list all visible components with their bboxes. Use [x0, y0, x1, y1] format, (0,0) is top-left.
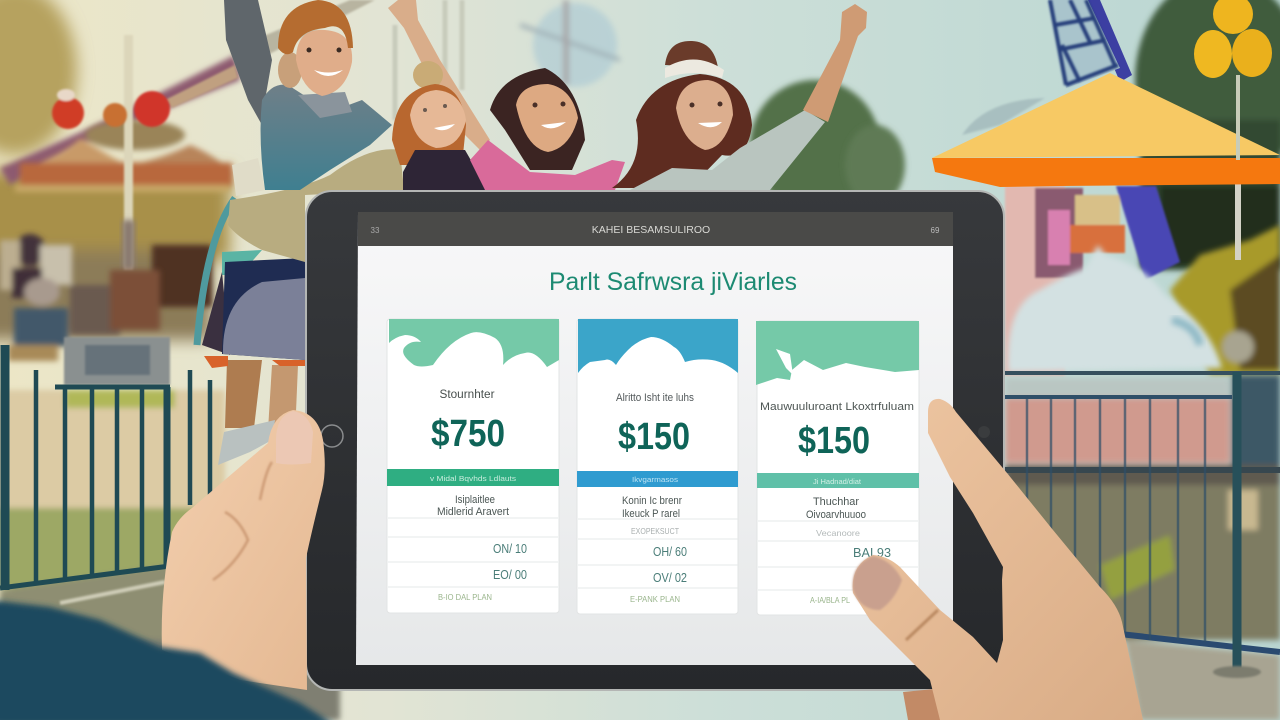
pricing card 2: Ikvgarmasos	[632, 475, 678, 484]
pricing card 3: $150	[798, 420, 870, 462]
ground behind left fence	[0, 390, 340, 720]
pricing card 2: OH/ 60	[653, 544, 687, 559]
people riding	[197, 0, 867, 465]
pricing card 2: EXOPEKSUCT	[631, 526, 679, 536]
pricing card 3: BAI 93	[853, 545, 891, 560]
pricing card 1: ON/ 10	[493, 541, 527, 556]
app header bar: KAHEI BESAMSULIROO	[592, 224, 710, 236]
right fence	[1005, 372, 1280, 670]
lamp post	[124, 35, 133, 270]
carousel roof	[15, 120, 235, 192]
app header bar	[358, 212, 953, 246]
pricing card 1: Midlerid Aravert	[437, 506, 509, 518]
pricing card 1: EO/ 00	[493, 567, 527, 582]
pricing card 2: Konin Ic brenr	[622, 495, 682, 507]
pricing card 1: v Midal Bqvhds Ldlauts	[430, 474, 516, 483]
seat rims	[204, 356, 305, 368]
pricing card 2	[577, 319, 738, 614]
yellow balloons	[1194, 0, 1272, 160]
girl with bun	[392, 61, 488, 190]
background poles	[395, 0, 462, 120]
tan drape	[228, 149, 404, 262]
left thumb nail	[276, 411, 313, 464]
girl in pink	[470, 68, 625, 190]
fence curb	[60, 582, 165, 603]
fence post base	[1213, 666, 1261, 678]
tree right	[1135, 0, 1280, 270]
foliage under carousel	[0, 170, 230, 340]
pricing card 2: Ikeuck P rarel	[622, 508, 680, 520]
tree centre	[750, 80, 880, 210]
raised arm	[388, 0, 490, 150]
carousel dark interior	[152, 245, 212, 307]
right thumb crease	[906, 610, 938, 640]
pricing card 3: Vecanoore	[816, 528, 860, 538]
rider shorts	[222, 258, 305, 360]
dark foreground shoulder	[0, 600, 335, 720]
right park ground	[1005, 375, 1280, 720]
pricing card 3: A-IA/BLA PL	[810, 596, 850, 605]
teen boy	[224, 0, 392, 190]
pricing card 3: Oivoarvhuuoo	[806, 509, 866, 521]
umbrella tent	[932, 73, 1280, 260]
ride frame	[197, 198, 235, 345]
pricing card 2: $150	[618, 416, 690, 458]
crowd	[0, 234, 160, 361]
grey fence panel	[64, 337, 170, 385]
tree top left	[0, 0, 77, 155]
left fence	[0, 345, 210, 590]
rider shoe	[218, 420, 275, 465]
rider legs	[225, 360, 262, 428]
park below tent	[1005, 186, 1180, 376]
yellow bushes	[1170, 225, 1280, 375]
faint dome behind tent	[962, 98, 1045, 135]
pricing card 1: Stournhter	[440, 389, 495, 401]
coaster track	[0, 55, 240, 185]
app header bar: 33	[371, 226, 380, 235]
pricing card 2: Alritto Isht ite luhs	[616, 392, 694, 404]
side sensor	[978, 426, 990, 438]
screen title: Parlt Safrwsra jiViarles	[549, 268, 797, 296]
app header bar: 69	[931, 226, 940, 235]
fountain	[1008, 245, 1222, 372]
pricing card 2: OV/ 02	[653, 570, 687, 585]
pricing card 1: Isiplaitlee	[455, 494, 495, 506]
red lanterns	[52, 89, 170, 129]
tablet screen	[356, 212, 953, 665]
pricing card 1: $750	[431, 413, 505, 455]
tablet	[306, 191, 1004, 690]
pricing card 2: E-PANK PLAN	[630, 595, 680, 604]
pricing card 3: Ji Hadnad/diat	[813, 477, 862, 486]
ferris wheel	[520, 0, 620, 87]
pricing card 3	[756, 321, 919, 615]
right thumb nail	[853, 556, 902, 610]
blue coaster tower	[1048, 0, 1132, 88]
left hand	[162, 410, 325, 690]
woman on right	[612, 4, 867, 190]
pricing card 1: B-IO DAL PLAN	[438, 593, 492, 602]
right hand	[853, 399, 1143, 720]
camera dot	[321, 425, 343, 447]
pricing card 1	[387, 319, 559, 613]
tablet bezel	[306, 191, 1004, 690]
pricing card 3: Thuchhar	[813, 496, 859, 508]
pricing card 3: Mauwuuluroant Lkoxtrfuluam	[760, 401, 914, 413]
left finger crease	[213, 462, 272, 580]
